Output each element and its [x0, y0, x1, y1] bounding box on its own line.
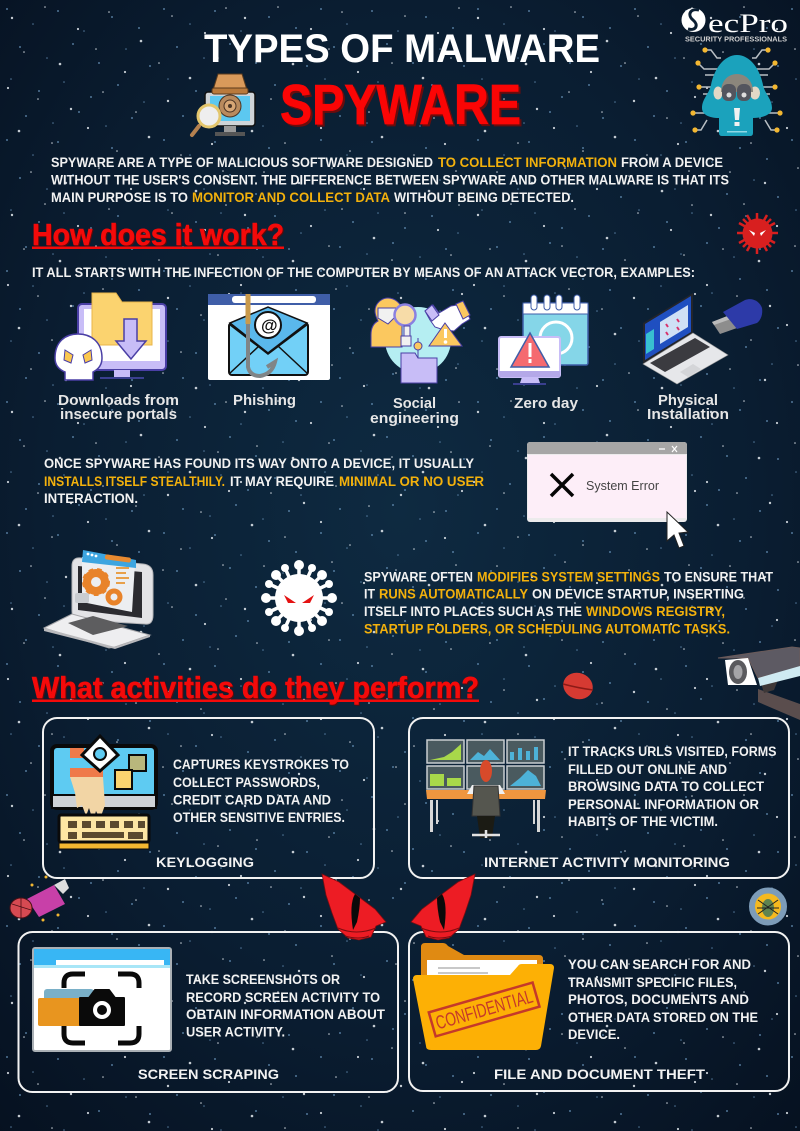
icon: zero day [499, 295, 588, 385]
labels: attack vectors [58, 392, 729, 427]
icon: phishing [208, 294, 330, 380]
text block: intro: WITHOUT BEING DETECTED. [394, 190, 574, 205]
text block: stealth install: IT MAY REQUIRE [230, 474, 334, 489]
text block: system settings: IT [364, 586, 376, 602]
icon: gear bug [752, 890, 784, 922]
icon: cursor [667, 512, 688, 548]
icon: white virus [261, 560, 337, 636]
text block: system settings: TO ENSURE THAT [664, 570, 774, 584]
panel: screen scraping [18, 932, 398, 1092]
icon: security camera [718, 647, 800, 720]
labels: attack vectors: Social [393, 395, 436, 412]
icon: confidential folder: CONFIDENTIAL [433, 987, 535, 1034]
panel: file and document theft [409, 932, 789, 1091]
text block: system settings: ITSELF INTO PLACES SUCH AS THE [364, 604, 582, 619]
icon: red eyes [322, 874, 475, 940]
text: keylogging description: OTHER SENSITIVE ENTRIES. [173, 810, 345, 825]
icon: spy at monitor [192, 74, 255, 136]
icon: infected usb [10, 876, 69, 922]
text: file theft description: OTHER DATA STORED ON THE [568, 1010, 758, 1025]
label: internet activity monitoring: INTERNET ACTIVITY MONITORING [484, 855, 730, 870]
text block: system settings: SPYWARE OFTEN [364, 570, 473, 584]
text: keylogging description: COLLECT PASSWORDS, [173, 775, 320, 790]
text block: system settings: WINDOWS REGISTRY, [586, 604, 725, 619]
text: keylogging description: CREDIT CARD DATA AND [173, 792, 331, 808]
text: screen scraping description [186, 972, 386, 1040]
text block: system settings: STARTUP FOLDERS, OR SCHEDULING AUTOMATIC TASKS. [364, 622, 730, 636]
icon: screenshot browser [33, 948, 171, 1051]
text block: stealth install: INTERACTION. [44, 491, 138, 506]
icon: monitoring desk [426, 740, 546, 838]
text block: intro: MONITOR AND COLLECT DATA [192, 190, 390, 205]
text block: stealth install: MINIMAL OR NO USER [339, 474, 484, 489]
text block: intro: MAIN PURPOSE IS TO [51, 190, 188, 205]
text: file theft description: DEVICE. [568, 1027, 620, 1042]
text: keylogging description: CAPTURES KEYSTROKES TO [173, 757, 349, 772]
icon: red virus [737, 213, 778, 254]
panel: internet activity monitoring [409, 718, 789, 878]
heading: spyware: SPYWARE [280, 73, 521, 137]
text block: stealth install: INSTALLS ITSELF STEALTHILY. [44, 474, 225, 489]
text: monitoring description: BROWSING DATA TO COLLECT [568, 779, 765, 794]
icon: social engineering [371, 298, 470, 383]
text: keylogging description [173, 757, 349, 825]
text block: stealth install [44, 456, 484, 506]
text: file theft description [568, 957, 758, 1042]
labels: attack vectors: Installation [647, 406, 729, 423]
text block: system settings: RUNS AUTOMATICALLY [379, 586, 528, 602]
text: monitoring description: IT TRACKS URLS VISITED, FORMS [568, 744, 776, 759]
labels: attack vectors: engineering [370, 410, 459, 427]
text block: intro [51, 155, 729, 205]
text: monitoring description: HABITS OF THE VICTIM. [568, 814, 718, 829]
text: file theft description: PHOTOS, DOCUMENTS AND [568, 992, 749, 1007]
icon: hooded hacker [690, 47, 783, 136]
logo: SecPro [682, 8, 788, 44]
text: attack vector intro: IT ALL STARTS WITH THE INFECTION OF THE COMPUTER BY MEANS OF AN ATTACK VECTOR, EXAMPLES: [32, 265, 695, 280]
label: keylogging: KEYLOGGING [156, 855, 254, 870]
text: screen scraping description: OBTAIN INFORMATION ABOUT [186, 1007, 386, 1022]
text: screen scraping description: RECORD SCREEN ACTIVITY TO [186, 990, 380, 1005]
logo: SecPro: ecPro [708, 9, 788, 38]
labels: attack vectors: Physical [658, 392, 718, 409]
icon: confidential folder [413, 943, 554, 1050]
text block: system settings [364, 570, 774, 636]
label: file and document theft: FILE AND DOCUMENT THEFT [494, 1067, 706, 1082]
icon: laptop with gears [44, 550, 153, 649]
label: screen scraping: SCREEN SCRAPING [138, 1067, 279, 1082]
text: screen scraping description: USER ACTIVITY. [186, 1024, 285, 1040]
text: screen scraping description: TAKE SCREENSHOTS OR [186, 972, 340, 987]
labels: attack vectors: Phishing [233, 392, 296, 409]
title: TYPES OF MALWARE [204, 27, 600, 71]
text block: intro: SPYWARE ARE A TYPE OF MALICIOUS SOFTWARE DESIGNED [51, 155, 433, 170]
text block: system settings: ON DEVICE STARTUP, INSERTING [532, 586, 744, 602]
text block: intro: FROM A DEVICE [621, 155, 723, 170]
text: monitoring description: FILLED OUT ONLINE AND [568, 762, 727, 777]
text block: stealth install: ONCE SPYWARE HAS FOUND ITS WAY ONTO A DEVICE, IT USUALLY [44, 456, 474, 471]
heading: how does it work: How does it work? [32, 217, 284, 252]
text: file theft description: YOU CAN SEARCH FOR AND [568, 957, 751, 972]
heading: what activities: What activities do they perform? [32, 670, 479, 705]
panel: keylogging [43, 718, 374, 878]
text block: intro: TO COLLECT INFORMATION [438, 155, 617, 170]
text: monitoring description: PERSONAL INFORMATION OR [568, 797, 759, 812]
icon: phishing: @ [261, 316, 278, 335]
error window: System Error [586, 479, 659, 493]
labels: attack vectors: Zero day [514, 395, 579, 412]
icon: downloads [55, 293, 166, 380]
text: file theft description: TRANSMIT SPECIFIC FILES, [568, 975, 737, 990]
labels: attack vectors: Downloads from [58, 392, 179, 409]
text block: intro: WITHOUT THE USER'S CONSENT. THE DIFFERENCE BETWEEN SPYWARE AND OTHER MALWARE IS THAT ITS [51, 172, 729, 188]
icon: laptop and usb [643, 293, 762, 384]
icon: red bug [559, 669, 597, 703]
text: monitoring description [568, 744, 776, 829]
error window [527, 442, 687, 522]
icon: keylogging [52, 736, 156, 849]
logo: SecPro: SECURITY PROFESSIONALS [685, 34, 787, 44]
text block: system settings: MODIFIES SYSTEM SETTINGS [477, 570, 660, 584]
labels: attack vectors: insecure portals [60, 406, 177, 423]
